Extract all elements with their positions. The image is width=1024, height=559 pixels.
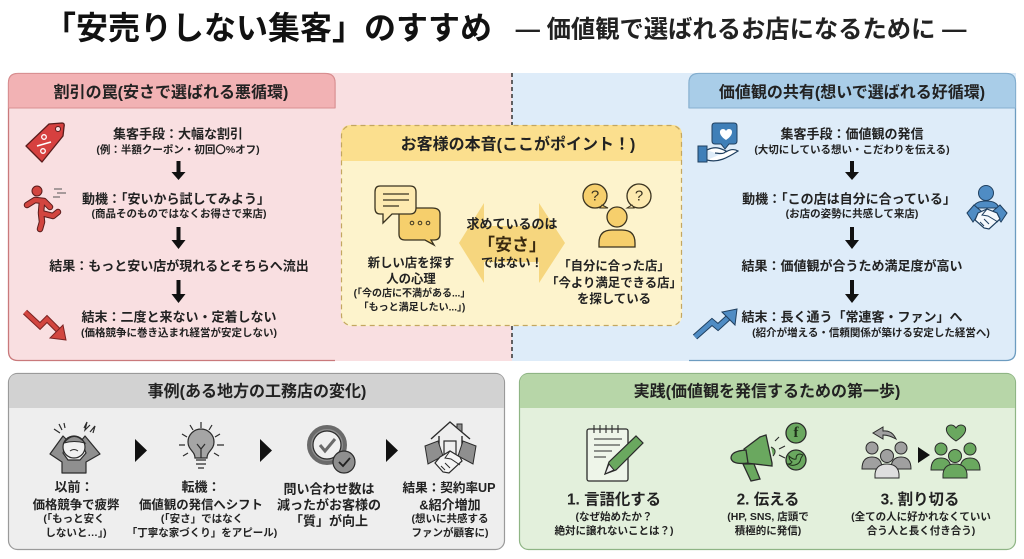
arrow [845, 227, 859, 249]
text: put it in words: 1. 言語化する [567, 490, 661, 508]
panel header: discount trap: 割引の罠(安さで選ばれる悪循環) [54, 82, 288, 102]
step: motive [82, 192, 270, 220]
icon: person with questions [583, 184, 651, 247]
text: seeking a new store: 「もっと満足したい...」) [359, 300, 465, 314]
icon: falling chart arrow [25, 312, 66, 340]
icon: person with questions: ? [591, 188, 599, 204]
panel: customer's true feelings [341, 125, 682, 326]
text: before: しないと…」) [45, 527, 107, 539]
text: seeking a new store: (「今の店に不満がある...」 [354, 286, 470, 300]
text: turning point: 価値観の発信へシフト [139, 497, 263, 512]
step: method: (例：半額クーポン・初回〇%オフ) [96, 143, 260, 156]
text: result: &紹介増加 [419, 498, 481, 512]
panel header: customer's true feelings [341, 125, 682, 161]
panel header: customer's true feelings: お客様の本音(ここがポイント！) [401, 134, 635, 154]
text: communicate [727, 490, 809, 537]
text: inquiries and quality: 「質」が向上 [290, 514, 368, 528]
text: before: 以前： [54, 480, 94, 494]
text: be selective: (全ての人に好かれなくていい [851, 510, 991, 523]
icon: stressed person [50, 422, 100, 473]
text: before [33, 480, 120, 539]
text: inquiries and quality [277, 482, 381, 528]
icon: hand with heart [698, 123, 738, 162]
icon: house and handshake [425, 422, 476, 473]
arrow [172, 161, 186, 180]
step: result: 結果：もっと安い店が現れるとそちらへ流出 [49, 258, 309, 274]
panel header: value sharing: 価値観の共有(想いで選ばれる好循環) [719, 82, 985, 102]
text: before: 価格競争で疲弊 [33, 497, 120, 512]
icon: megaphone with social media: f [794, 425, 800, 441]
text: communicate: 積極的に発信) [735, 524, 801, 537]
step: motive: (商品そのものではなくお得さで来店) [92, 207, 266, 220]
icon: rising chart arrow [695, 309, 737, 337]
text: inquiries and quality: 減ったがお客様の [277, 498, 381, 512]
panel header: discount trap [8, 74, 335, 108]
step: method [96, 126, 260, 156]
text: put it in words: 絶対に譲れないことは？) [554, 524, 674, 537]
arrow [918, 447, 930, 463]
title: 「安売りしない集客」のすすめ [44, 10, 492, 46]
icon: person and handshake [967, 186, 1007, 229]
arrow [172, 280, 186, 303]
text: seeking a new store: 新しい店を探す [368, 255, 454, 270]
step: outcome: (紹介が増える・信頼関係が築ける安定した経営へ) [752, 326, 990, 339]
text: put it in words: (なぜ始めたか？ [576, 510, 652, 523]
arrow [386, 439, 398, 462]
double arrow: not about cheapness: 求めているのは [466, 216, 558, 232]
step: motive: 動機：「この店は自分に合っている」 [742, 192, 956, 206]
arrow [845, 161, 859, 180]
step: method: 集客手段：大幅な割引 [113, 126, 243, 142]
step: motive: (お店の姿勢に共感して来店) [786, 207, 918, 220]
icon: notepad and pencil [587, 425, 643, 481]
icon: person with questions: ? [635, 188, 643, 204]
panel header: case study: 事例(ある地方の工務店の変化) [148, 382, 366, 400]
text: result: ファンが顧客に) [412, 526, 488, 539]
text: before: (「もっと安く [43, 512, 105, 525]
subtitle: — 価値観で選ばれるお店になるために — [516, 16, 967, 44]
panel: practice [520, 374, 1016, 550]
icon: green customers [931, 425, 980, 478]
text: turning point: 転機： [181, 480, 221, 494]
text: turning point: (「安さ」ではなく [161, 512, 243, 525]
panel: case study [8, 374, 504, 550]
icon: grey customers [862, 427, 911, 478]
step: motive [742, 192, 956, 220]
double arrow: not about cheapness: 「安さ」 [478, 236, 546, 254]
panel: discount trap [8, 73, 512, 361]
text: turning point: 「丁寧な家づくり」をアピール) [127, 526, 277, 539]
text: result: (想いに共感する [412, 512, 488, 525]
panel: value sharing [512, 73, 1016, 361]
double arrow: not about cheapness [459, 203, 565, 283]
panel header: practice [520, 374, 1015, 408]
text: inquiries and quality: 問い合わせ数は [283, 482, 375, 496]
text: looking for a matching store: を探している [577, 292, 651, 306]
text: put it in words [554, 490, 674, 537]
text: looking for a matching store [546, 258, 682, 306]
step: method: (大切にしている想い・こだわりを伝える) [754, 143, 950, 156]
text: be selective [851, 490, 991, 537]
step: outcome [741, 310, 990, 339]
step: outcome: (価格競争に巻き込まれ経営が安定しない) [81, 326, 277, 339]
icon: quality badge [309, 427, 355, 473]
text: turning point [127, 480, 277, 539]
panel header: value sharing [689, 74, 1016, 108]
step: outcome: 結末：長く通う「常連客・ファン」へ [741, 310, 963, 324]
icon: discount tag [26, 123, 64, 162]
icon: megaphone with social media [731, 423, 806, 481]
step: method [754, 126, 950, 156]
step: result: 結果：価値観が合うため満足度が高い [741, 258, 963, 274]
arrow [172, 227, 186, 249]
arrow [845, 280, 859, 303]
text: looking for a matching store: 「今より満足できる店」 [546, 275, 682, 290]
text: communicate: (HP, SNS, 店頭で [727, 511, 809, 523]
icon: running person [27, 186, 66, 229]
arrow [135, 439, 147, 462]
step: outcome [81, 310, 277, 339]
text: result: 結果：契約率UP [402, 480, 496, 495]
icon: chat bubbles [375, 186, 440, 245]
icon: light bulb [179, 422, 224, 468]
arrow [260, 439, 272, 462]
double arrow: not about cheapness: ではない！ [481, 256, 543, 270]
text: result [402, 480, 496, 539]
step: motive: 動機：「安いから試してみよう」 [82, 192, 270, 206]
text: seeking a new store: 人の心理 [386, 271, 436, 286]
text: looking for a matching store: 「自分に合った店」 [558, 258, 670, 273]
text: be selective: 3. 割り切る [881, 490, 959, 508]
text: seeking a new store [354, 255, 470, 314]
step: method: 集客手段：価値観の発信 [780, 126, 924, 142]
text: communicate: 2. 伝える [737, 490, 799, 508]
text: be selective: 合う人と長く付き合う) [867, 524, 975, 537]
panel header: practice: 実践(価値観を発信するための第一歩) [634, 382, 900, 400]
panel header: case study [9, 374, 504, 408]
step: outcome: 結末：二度と来ない・定着しない [81, 310, 277, 324]
